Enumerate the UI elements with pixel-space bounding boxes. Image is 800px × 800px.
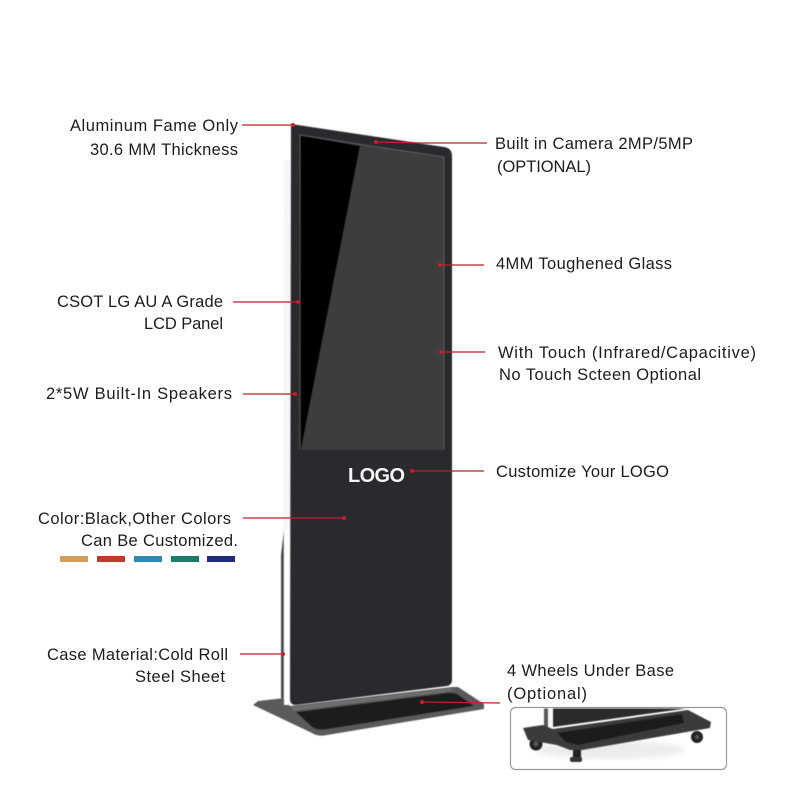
logo on panel: LOGO (348, 465, 405, 487)
screen glass (298, 135, 444, 450)
wheels (530, 738, 542, 750)
label: case material (47, 646, 228, 686)
label: lcd panel: CSOT LG AU A Grade (57, 293, 223, 311)
label: color options: Color:Black,Other Colors (38, 510, 231, 528)
callout lines (233, 123, 500, 704)
label: lcd panel (57, 293, 223, 333)
label: camera (495, 135, 693, 176)
product: floor standing display (253, 124, 484, 736)
label: glass: 4MM Toughened Glass (496, 255, 672, 273)
base plate (253, 687, 484, 736)
label: color options: Can Be Customized. (81, 532, 238, 550)
label: logo: Customize Your LOGO (496, 463, 669, 481)
rear column (281, 160, 290, 705)
label: camera: Built in Camera 2MP/5MP (495, 135, 693, 153)
line: touch (439, 350, 485, 354)
label: lcd panel: LCD Panel (144, 315, 223, 333)
label: wheels (507, 662, 674, 703)
line: logo (410, 469, 484, 473)
line: aluminum frame (242, 123, 295, 127)
line: speakers (243, 392, 297, 396)
label: wheels: 4 Wheels Under Base (507, 662, 674, 680)
label: case material: Steel Sheet (135, 668, 225, 686)
line: case material (240, 652, 285, 656)
label: camera: (OPTIONAL) (497, 158, 591, 176)
label: aluminum frame: 30.6 MM Thickness (90, 141, 238, 159)
label: touch: No Touch Scteen Optional (499, 366, 701, 384)
line: wheels (420, 700, 500, 704)
label: case material: Case Material:Cold Roll (47, 646, 228, 664)
label: aluminum frame: Aluminum Fame Only (70, 117, 239, 135)
label: wheels: (Optional) (507, 685, 587, 703)
color swatches (60, 556, 235, 562)
line: lcd panel (233, 300, 300, 304)
label: aluminum frame (70, 117, 239, 159)
label: speakers: 2*5W Built-In Speakers (46, 385, 232, 403)
label: touch (498, 344, 756, 384)
inset: wheeled base (510, 708, 726, 770)
display body (290, 124, 452, 705)
line: color (243, 516, 346, 520)
line: camera (374, 140, 487, 144)
label: touch: With Touch (Infrared/Capacitive) (498, 344, 756, 362)
label: color options (38, 510, 238, 550)
line: glass (438, 263, 484, 267)
glass reflection (299, 135, 360, 450)
